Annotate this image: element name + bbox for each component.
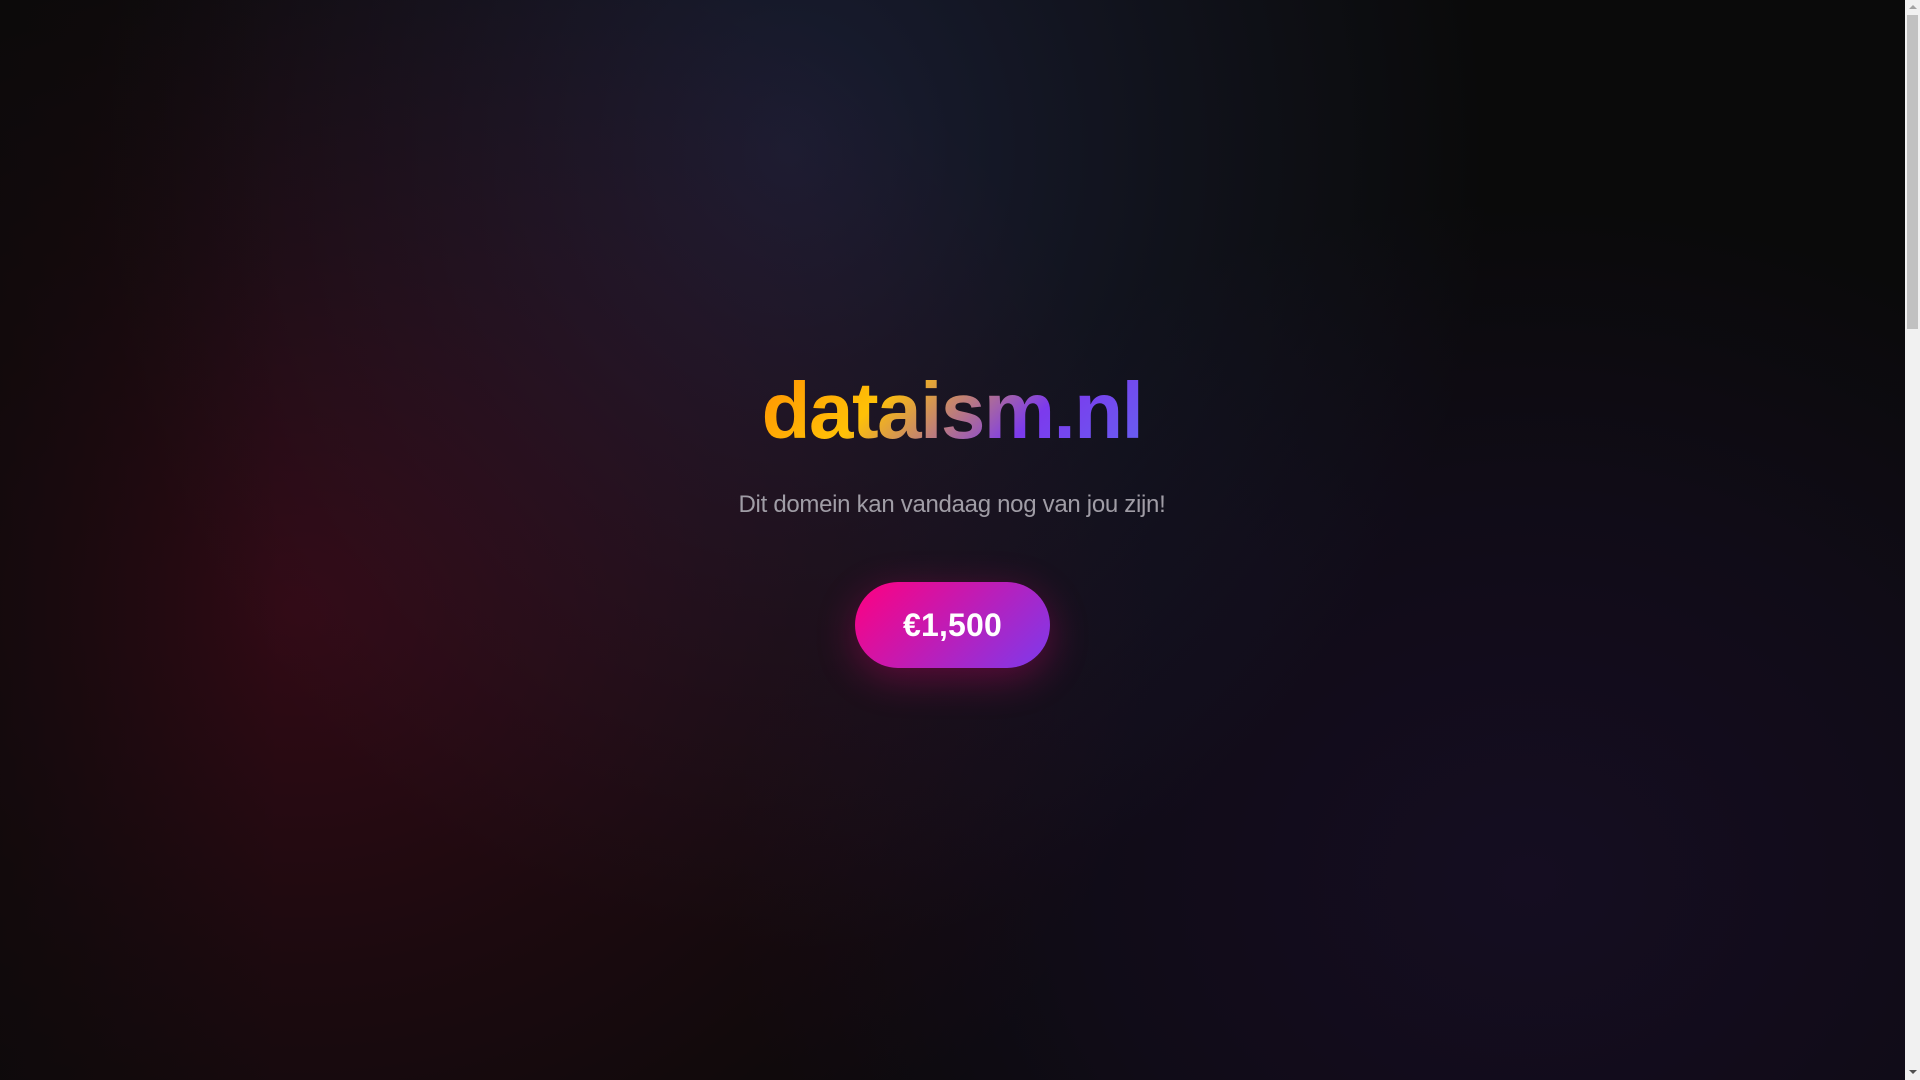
scrollbar thumb (1907, 15, 1918, 329)
price button (855, 582, 1050, 668)
subtitle text: Dit domein kan vandaag nog van jou zijn! (739, 491, 1165, 518)
scrollbar (1905, 0, 1920, 1080)
price button: €1,500 (903, 607, 1002, 643)
title: dataism.nl (762, 366, 1142, 455)
icon: scroll down arrow (1908, 1070, 1916, 1074)
icon: scroll up arrow (1908, 5, 1916, 9)
